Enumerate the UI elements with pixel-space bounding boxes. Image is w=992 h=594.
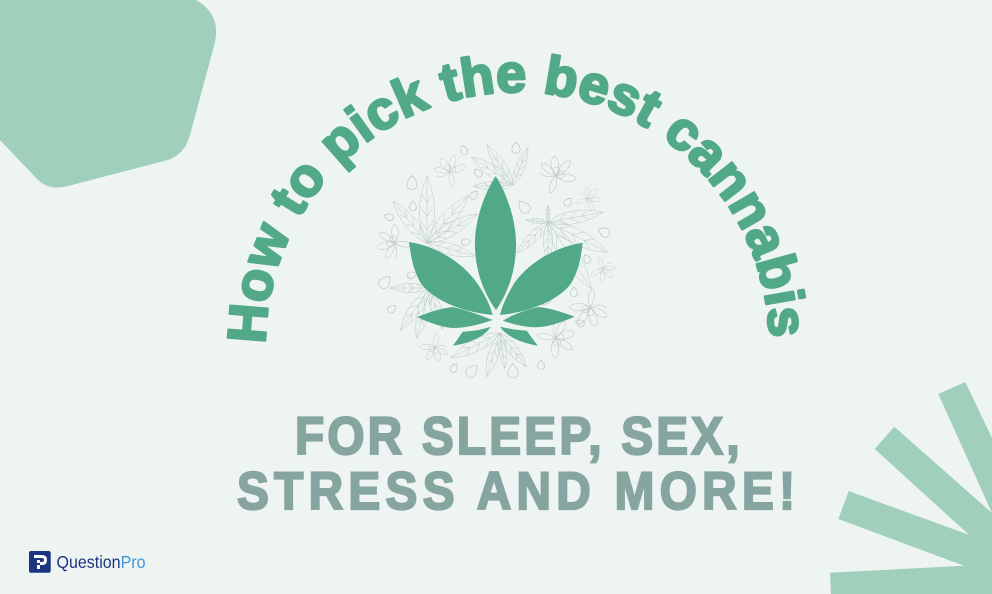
leaf: lower left	[417, 307, 493, 328]
sketch palm leaf: lower left	[390, 283, 447, 340]
logo icon	[29, 551, 51, 573]
subtitle line 2: STRESS AND MORE!	[237, 461, 795, 521]
sketch flowers	[371, 149, 618, 366]
leaf: upper left	[409, 242, 493, 315]
central cannabis leaf logo	[409, 176, 583, 346]
sketch palm leaf: top	[468, 142, 532, 191]
decorative starburst: bottom right	[830, 382, 992, 594]
logo wordmark: QuestionPro	[56, 552, 146, 572]
sketch seeds	[377, 142, 611, 379]
sketch palm leaf: right	[513, 205, 611, 294]
subtitle	[237, 406, 795, 521]
decorative rounded polygon: top left	[0, 0, 216, 188]
leaf: lower right	[503, 307, 575, 327]
leaf: bottom right	[500, 327, 538, 346]
leaf: bottom left	[453, 327, 491, 346]
sketch palm leaf: upper left	[388, 176, 481, 261]
QuestionPro logo	[29, 551, 146, 573]
leaf: top centre	[475, 176, 516, 310]
line-art botanical illustration	[371, 142, 618, 379]
subtitle line 1: FOR SLEEP, SEX,	[295, 406, 740, 466]
leaf: upper right	[500, 243, 583, 315]
sketch palm leaf: bottom	[448, 327, 530, 379]
curved title: How to pick the best cannabis	[226, 53, 806, 342]
